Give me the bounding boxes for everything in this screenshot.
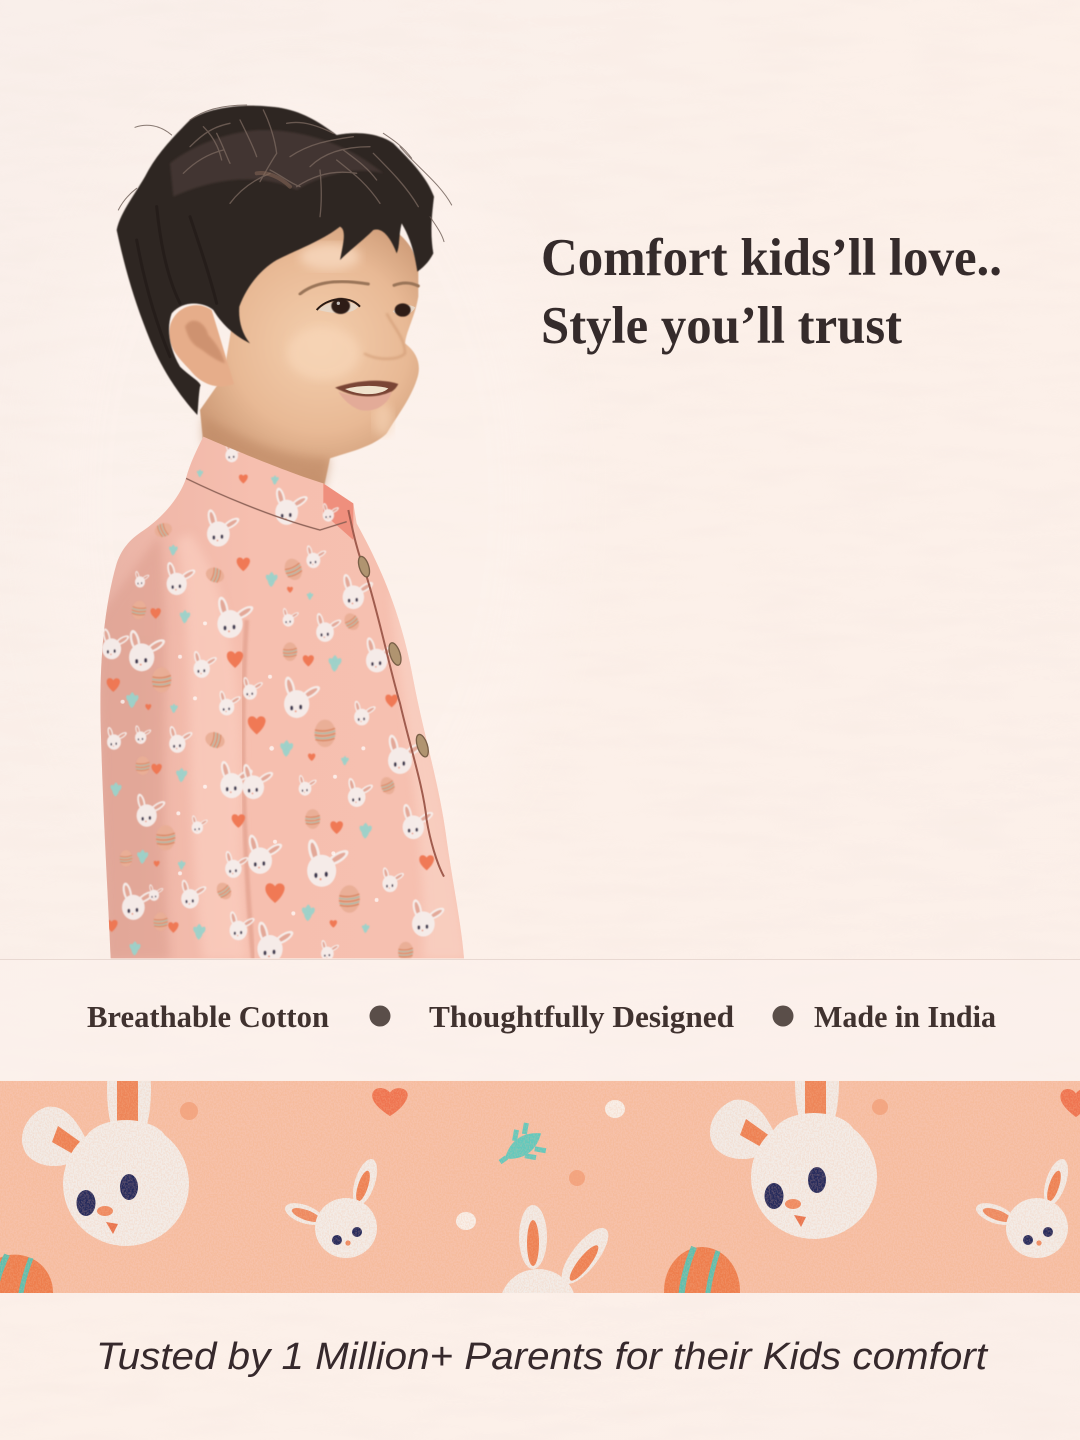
smile: [335, 381, 398, 397]
teal leaf: [490, 1119, 551, 1176]
shirt shading and print: [97, 441, 467, 963]
easter eggs: [0, 1255, 53, 1330]
stray hair strands: [118, 105, 452, 242]
headline: [541, 229, 1002, 355]
feature labels: Made in India: [814, 1000, 996, 1034]
white dots: [121, 621, 379, 915]
partial bunny at bottom: [500, 1205, 616, 1341]
headline: Comfort kids’ll love..: [541, 229, 1002, 287]
feature labels: [87, 1000, 996, 1034]
fabric band with bunny print: [0, 1020, 1080, 1341]
feature strip: [0, 959, 1080, 1080]
wooden buttons: [356, 555, 431, 758]
kurta with bunny print: [97, 437, 467, 963]
photo: smiling boy in bunny print kurta: [97, 105, 467, 963]
trust statement: Tusted by 1 Million+ Parents for their Kids comfort: [96, 1336, 989, 1378]
small bunnies: [282, 1156, 382, 1258]
head, face and hair: [117, 105, 452, 490]
eyebrows: [300, 282, 418, 294]
feature labels: Breathable Cotton: [87, 1000, 329, 1034]
placket line: [348, 510, 444, 877]
separator dots: [370, 1006, 794, 1026]
hearts: [372, 1088, 408, 1116]
nose: [364, 313, 405, 359]
headline: Style you’ll trust: [541, 297, 902, 355]
collar edge: [186, 478, 347, 530]
hair: [117, 106, 434, 415]
ear: [169, 305, 234, 386]
feature labels: Thoughtfully Designed: [429, 1000, 734, 1034]
eyes: [318, 301, 358, 313]
rabbits, hearts, eggs and leaves: [101, 441, 446, 963]
white dots: [605, 1100, 625, 1118]
face: [200, 220, 419, 490]
big bunnies: [22, 1027, 189, 1246]
shirt body: [100, 437, 464, 958]
